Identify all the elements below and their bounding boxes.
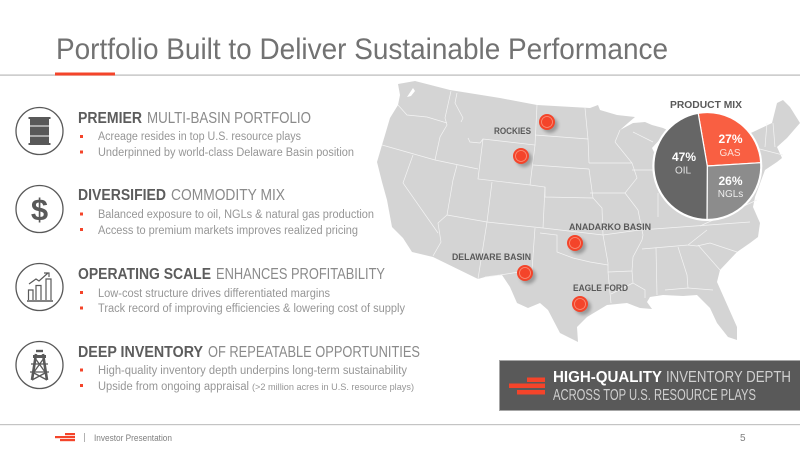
bullets bbox=[80, 365, 414, 393]
heading: OF REPEATABLE OPPORTUNITIES bbox=[208, 344, 420, 361]
slice: NGLs 26% bbox=[707, 163, 761, 220]
pie values: NGLs bbox=[718, 189, 743, 200]
bullets: Underpinned by world-class Delaware Basin position bbox=[98, 147, 354, 159]
heading bbox=[78, 110, 311, 127]
callout text: HIGH-QUALITY bbox=[553, 369, 663, 386]
heading: DEEP INVENTORY bbox=[78, 344, 204, 361]
heading: COMMODITY MIX bbox=[171, 187, 286, 204]
bullets: Upside from ongoing appraisal bbox=[98, 381, 249, 393]
label: Delaware Basin: DELAWARE BASIN bbox=[452, 252, 531, 263]
bullets: Low-cost structure drives differentiated margins bbox=[98, 288, 330, 300]
label: Anadarko Basin: ANADARKO BASIN bbox=[569, 222, 651, 233]
label: Rockies: ROCKIES bbox=[494, 126, 531, 137]
bullets: Balanced exposure to oil, NGLs & natural gas production bbox=[98, 209, 374, 221]
heading: ENHANCES PROFITABILITY bbox=[216, 266, 385, 283]
bullets: Acreage resides in top U.S. resource plays bbox=[98, 131, 301, 143]
marker: Delaware Basin bbox=[517, 265, 536, 284]
section: diversified commodity mix bbox=[16, 186, 374, 237]
bullets: (>2 million acres in U.S. resource plays) bbox=[252, 382, 414, 393]
bullets: High-quality inventory depth underpins long-term sustainability bbox=[98, 365, 407, 377]
marker: Rockies south bbox=[513, 148, 532, 167]
header rule with red accent bbox=[0, 72, 800, 76]
slice: gas 27% bbox=[698, 113, 761, 166]
heading bbox=[78, 266, 385, 283]
pie chart: product mix bbox=[652, 111, 762, 221]
bullets bbox=[80, 288, 405, 315]
marker: Rockies north bbox=[539, 114, 558, 133]
section: deep inventory bbox=[16, 342, 420, 393]
heading bbox=[78, 344, 420, 361]
footer bbox=[0, 424, 800, 444]
slice: oil 47% bbox=[654, 113, 707, 220]
callout text bbox=[553, 369, 791, 404]
callout: high-quality inventory depth bbox=[500, 360, 800, 410]
icon: oil barrel bbox=[16, 108, 63, 154]
heading: MULTI-BASIN PORTFOLIO bbox=[147, 110, 311, 127]
pie values: GAS bbox=[719, 148, 741, 159]
marker: Anadarko Basin bbox=[567, 235, 586, 254]
map of the United States bbox=[377, 81, 800, 342]
pie values: 27% bbox=[718, 132, 743, 146]
icon: rising bar chart bbox=[16, 264, 63, 310]
footer text: Investor Presentation bbox=[94, 433, 172, 443]
pie values: OIL bbox=[675, 166, 691, 176]
heading: OPERATING SCALE bbox=[78, 266, 211, 283]
pie values bbox=[672, 132, 743, 200]
marker: Eagle Ford bbox=[572, 296, 591, 315]
section: operating scale bbox=[16, 264, 405, 315]
icon: dollar sign: $ bbox=[31, 192, 48, 227]
pie values: 26% bbox=[718, 174, 743, 188]
icon: footer logo bbox=[55, 433, 75, 441]
bullets: Track record of improving efficiencies & lowering cost of supply bbox=[98, 303, 405, 315]
icon: dollar sign bbox=[16, 186, 63, 232]
label: Eagle Ford: EAGLE FORD bbox=[573, 283, 628, 294]
icon: drilling rig bbox=[16, 342, 63, 388]
bullets bbox=[80, 209, 374, 237]
section: premier multi-basin portfolio bbox=[16, 108, 354, 159]
pie chart title: PRODUCT MIX bbox=[670, 99, 742, 111]
heading: DIVERSIFIED bbox=[78, 187, 166, 204]
heading bbox=[78, 187, 286, 204]
heading: PREMIER bbox=[78, 110, 142, 127]
icon: red bars logo bbox=[509, 378, 545, 394]
pie values: 47% bbox=[672, 150, 696, 164]
title: Portfolio Built to Deliver Sustainable Performance bbox=[56, 33, 668, 66]
page number: 5 bbox=[740, 433, 746, 444]
bullets bbox=[80, 131, 354, 159]
bullets: Access to premium markets improves realized pricing bbox=[98, 225, 358, 237]
